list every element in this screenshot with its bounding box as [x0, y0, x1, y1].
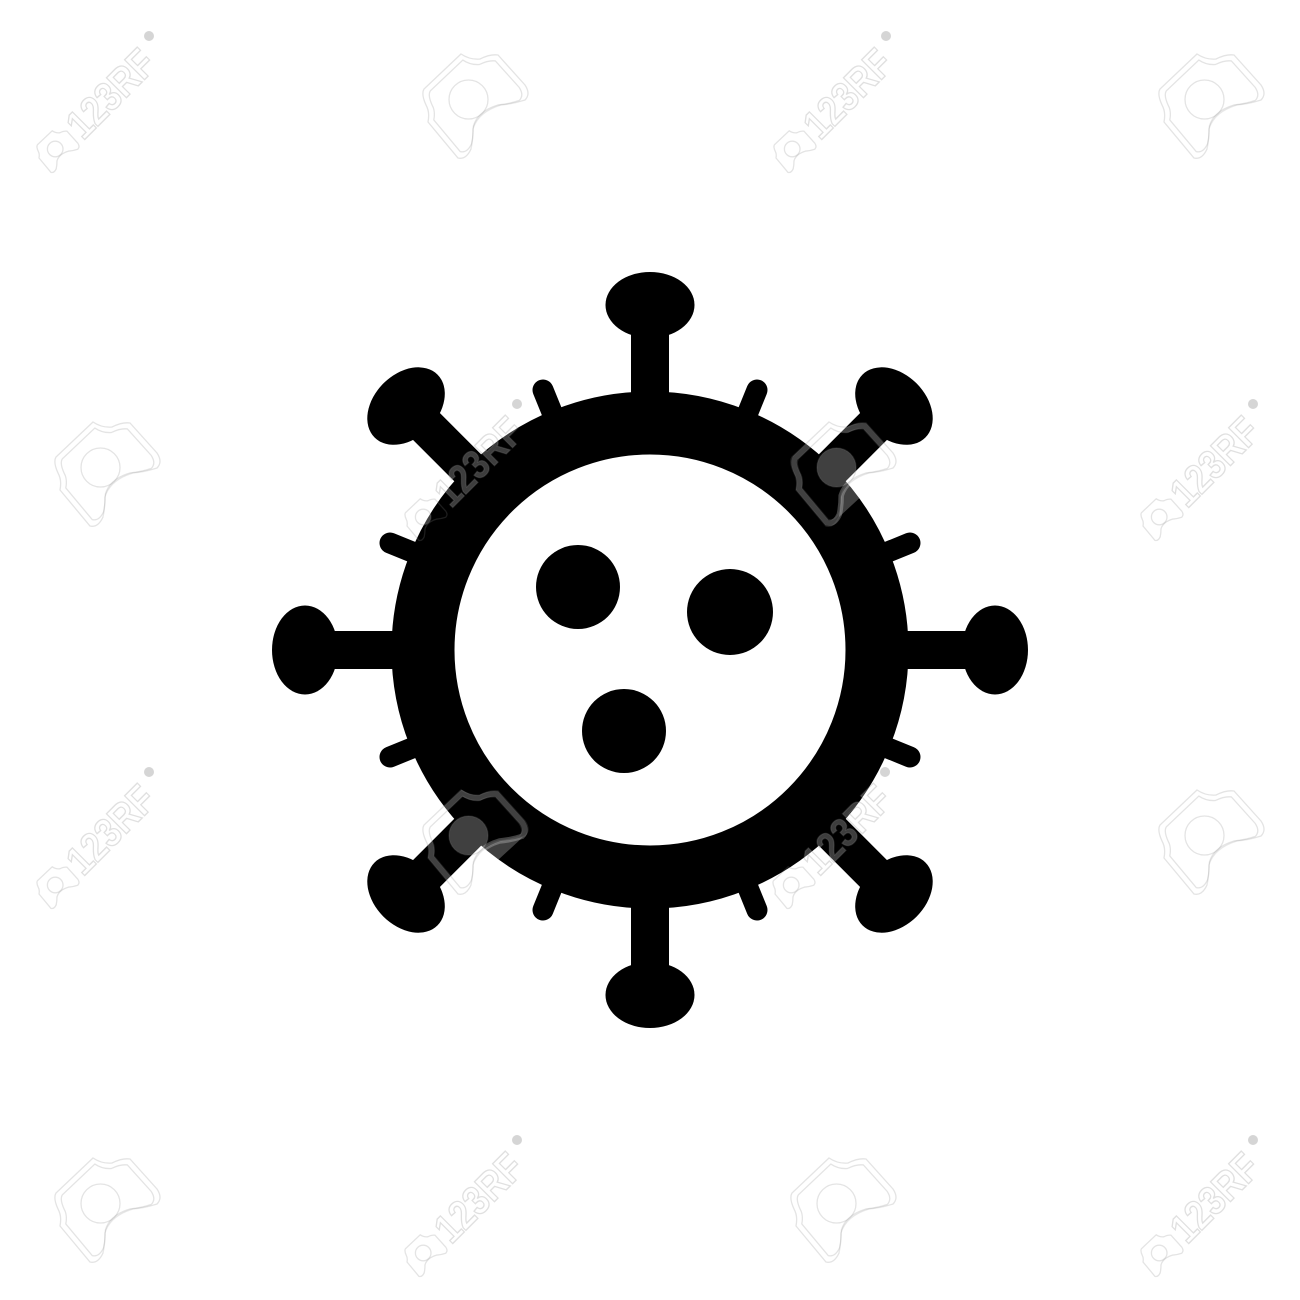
- inner dots: [536, 545, 773, 773]
- watermark badge 4: [1159, 54, 1264, 158]
- watermark logo 4: [1141, 399, 1268, 541]
- long spikes: [272, 272, 1028, 1028]
- watermark logo 3: 123RF: [425, 408, 532, 515]
- watermark logo 7: 123RF: [425, 1144, 532, 1251]
- watermark logo 6: [773, 767, 900, 909]
- virus body ring: [423, 423, 877, 877]
- watermark logo 1: [37, 31, 164, 173]
- watermark logo 5: [37, 767, 164, 909]
- watermark badge 1: [55, 422, 160, 526]
- watermark logo 6: 123RF: [793, 776, 900, 883]
- watermark logo 3: [405, 399, 532, 541]
- watermark badge 2: [423, 54, 528, 158]
- virus: [272, 272, 1028, 1028]
- watermark logo 5: 123RF: [57, 776, 164, 883]
- watermark logo 8: [1141, 1135, 1268, 1277]
- watermark badge 7: [55, 1158, 160, 1262]
- watermark logo 1: 123RF: [57, 40, 164, 147]
- watermark badge 8: [791, 1158, 896, 1262]
- watermark badge 6: [1159, 790, 1264, 894]
- watermark logo 2: [774, 31, 901, 173]
- watermark logo 2: 123RF: [794, 40, 901, 147]
- watermark badge 5: [423, 790, 528, 894]
- watermark logo 7: [405, 1135, 532, 1277]
- watermark badge 3: [791, 422, 896, 526]
- watermark logo 8: 123RF: [1161, 1144, 1268, 1251]
- watermark logo 4: 123RF: [1161, 408, 1268, 515]
- short spikes: [390, 390, 910, 910]
